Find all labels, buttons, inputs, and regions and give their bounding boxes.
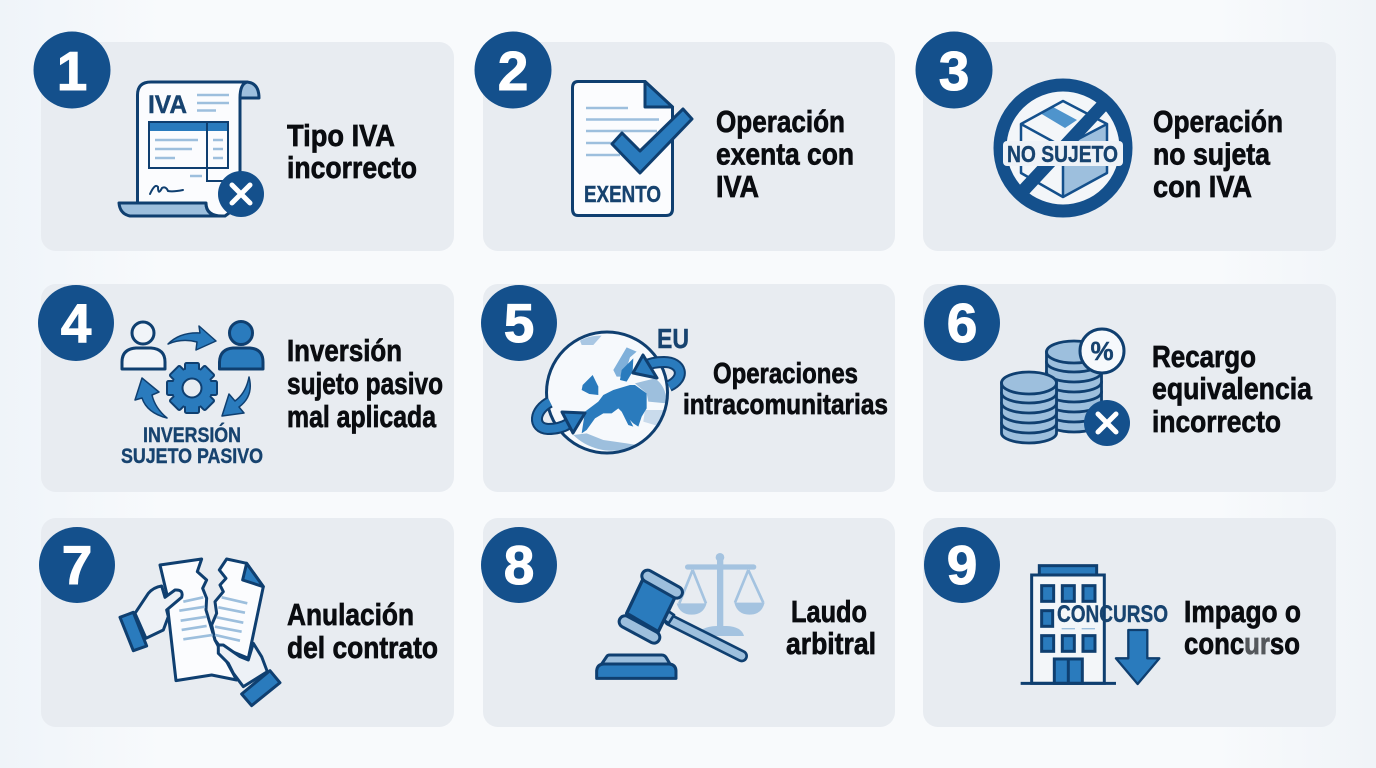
text: Anulación del contrato: Anulación <box>287 597 414 632</box>
badge 7 <box>39 527 115 603</box>
panel 7: anulación del contrato <box>39 518 454 727</box>
text: Anulación del contrato <box>287 597 438 665</box>
badge 1: 1 <box>57 40 87 102</box>
text: Operaciones intracomunitarias: intracomunitarias <box>683 389 888 421</box>
icon: building with concurso label and down arrow <box>1021 566 1168 684</box>
badge 9: 9 <box>947 534 977 596</box>
badge 2 <box>474 32 552 108</box>
badge 5 <box>481 285 557 361</box>
text: Inversión sujeto pasivo mal aplicada <box>287 333 443 434</box>
panel 2: operación exenta <box>474 32 895 251</box>
card 6 <box>923 284 1336 492</box>
panel 3: operación no sujeta <box>916 32 1336 251</box>
text: Operación no sujeta con IVA <box>1153 104 1283 204</box>
icon: reverse charge cycle <box>121 322 263 468</box>
badge 7: 7 <box>62 534 92 596</box>
badge 1 <box>34 32 110 108</box>
icon: prohibited box with label: NO SUJETO <box>1007 141 1118 167</box>
text: Operación no sujeta con IVA: Operación <box>1153 104 1283 139</box>
icon: exempt document with check: EXENTO <box>584 181 661 207</box>
card 1 <box>41 42 454 251</box>
text: Operación exenta con IVA: Operación <box>716 104 845 139</box>
panel 5: operaciones intracomunitarias <box>481 284 895 492</box>
text: Operación exenta con IVA: exenta con <box>716 136 854 172</box>
icon: exempt document with check <box>572 82 692 216</box>
badge 9 <box>924 527 1000 603</box>
icon: building with concurso label and down arrow: CONCURSO <box>1057 601 1168 628</box>
badge 3: 3 <box>939 40 969 102</box>
badge 6: 6 <box>947 292 977 354</box>
text: Inversión sujeto pasivo mal aplicada: mal aplicada <box>287 399 437 434</box>
card 2 <box>483 42 895 251</box>
text: Recargo equivalencia incorrecto: equivalencia <box>1152 371 1313 406</box>
icon: prohibited box with label <box>1000 85 1126 211</box>
text: Operaciones intracomunitarias <box>683 358 888 421</box>
icon: coin stacks with percent and cross: % <box>1090 336 1114 366</box>
badge 4 <box>38 285 114 361</box>
text: Laudo arbitral <box>786 594 876 661</box>
card 5 <box>483 284 895 492</box>
icon: EU globe with arrows <box>537 323 689 453</box>
text: Recargo equivalencia incorrecto: incorrecto <box>1152 404 1281 439</box>
icon: gavel and scales <box>597 553 765 678</box>
text: Recargo equivalencia incorrecto: Recargo <box>1152 339 1256 374</box>
text: Inversión sujeto pasivo mal aplicada: Inversión <box>287 333 402 368</box>
card 7 <box>41 518 454 727</box>
panel 6: recargo equivalencia <box>923 284 1336 492</box>
text: Operaciones intracomunitarias: Operaciones <box>713 358 858 390</box>
card 3 <box>923 42 1336 251</box>
text: Tipo IVA incorrecto <box>287 118 417 185</box>
panel 9: impago o concurso <box>923 518 1336 727</box>
badge 3 <box>916 32 992 108</box>
text: Impago o concurso: concurso <box>1184 626 1300 661</box>
text: Operación no sujeta con IVA: no sujeta <box>1153 136 1271 172</box>
icon: IVA invoice scroll: IVA <box>148 91 187 119</box>
badge 2: 2 <box>498 40 528 102</box>
icon: IVA invoice scroll <box>119 82 264 217</box>
text: Anulación del contrato: del contrato <box>287 630 438 665</box>
icon: reverse charge cycle: SUJETO PASIVO <box>121 445 263 468</box>
text: Laudo arbitral: Laudo <box>791 594 867 629</box>
panel 1: tipo IVA incorrecto <box>34 32 454 251</box>
text: Tipo IVA incorrecto: incorrecto <box>287 150 417 185</box>
icon: torn contract held by two hands <box>120 559 280 706</box>
text: Inversión sujeto pasivo mal aplicada: sujeto pasivo <box>287 366 443 401</box>
text: Tipo IVA incorrecto: Tipo IVA <box>287 118 395 153</box>
text: Impago o concurso <box>1184 594 1301 661</box>
badge 6 <box>924 285 1000 361</box>
card 9 <box>923 518 1336 727</box>
badge 8 <box>481 527 557 603</box>
icon: coin stacks with percent and cross <box>1002 329 1130 446</box>
panel 8: laudo arbitral <box>481 518 895 727</box>
icon: reverse charge cycle: INVERSIÓN <box>143 423 241 447</box>
card 4 <box>41 284 454 492</box>
text: Operación exenta con IVA: IVA <box>716 169 759 204</box>
text: Operación no sujeta con IVA: con IVA <box>1153 169 1252 204</box>
text: Operación exenta con IVA <box>716 104 854 204</box>
icon: EU globe with arrows: EU <box>657 323 689 354</box>
text: Recargo equivalencia incorrecto <box>1152 339 1313 439</box>
card 8 <box>483 518 895 727</box>
badge 8: 8 <box>504 534 534 596</box>
panel 4: inversión sujeto pasivo <box>38 284 454 492</box>
text: Impago o concurso: Impago o <box>1184 594 1301 629</box>
text: Laudo arbitral: arbitral <box>786 626 876 661</box>
badge 5: 5 <box>504 292 534 354</box>
badge 4: 4 <box>61 292 92 354</box>
